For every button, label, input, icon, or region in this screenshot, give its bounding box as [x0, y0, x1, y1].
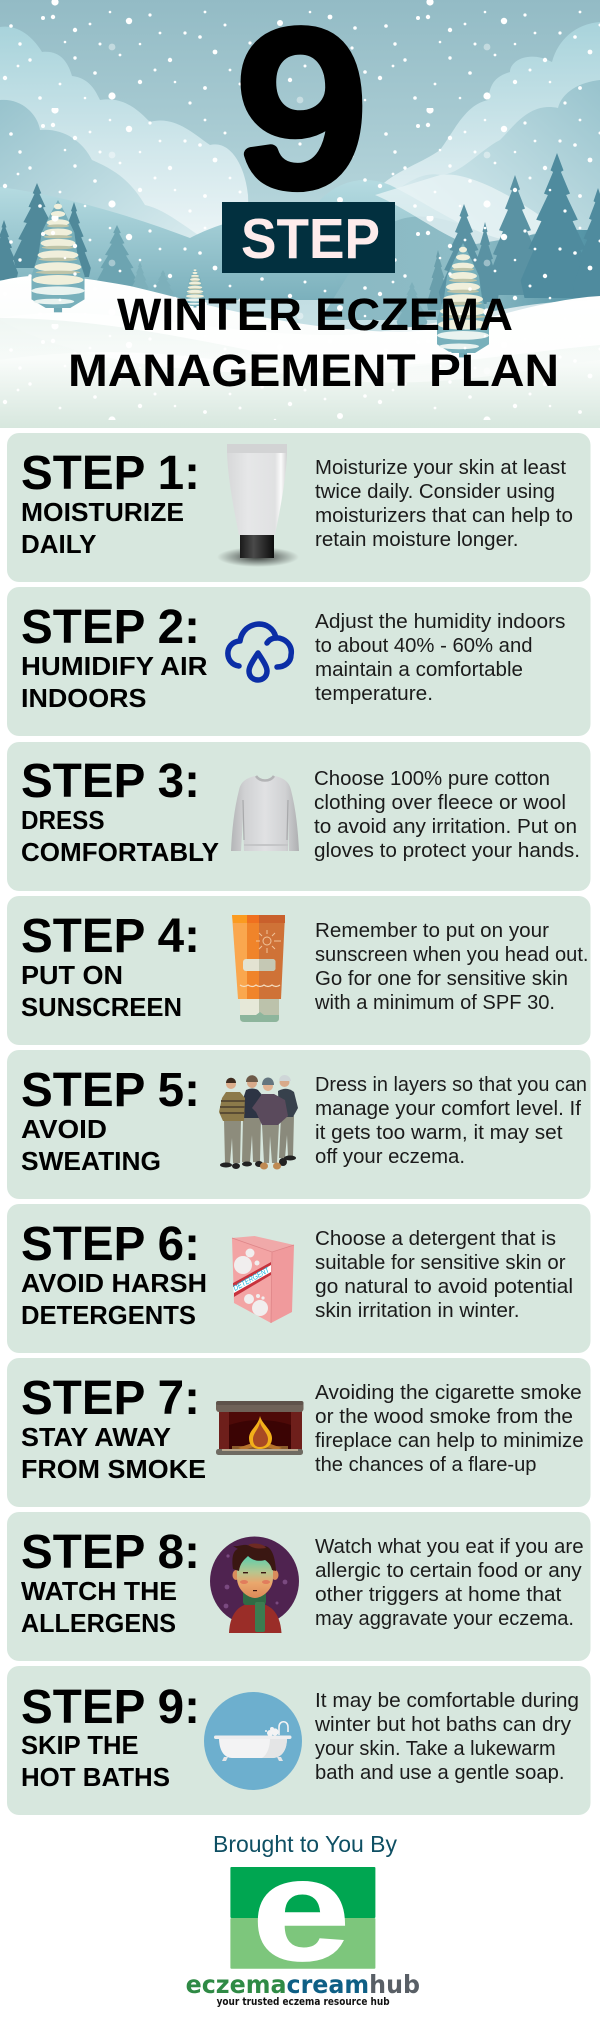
step 6 text: Choose a detergent that is	[315, 1228, 556, 1250]
step 1 subtitle: MOISTURIZE	[21, 497, 184, 527]
title: winter eczema management plan: MANAGEMENT PLAN	[68, 345, 559, 396]
title: winter eczema management plan: WINTER ECZEMA	[117, 289, 513, 340]
icon: fireplace	[216, 1401, 304, 1455]
step 7 subtitle	[21, 1422, 206, 1484]
step 5 text: Dress in layers so that you can	[315, 1074, 587, 1096]
title badge: STEP: STEP	[241, 207, 380, 271]
icon: sunscreen tube	[232, 915, 285, 1022]
step 2 text	[315, 611, 566, 705]
step 3 subtitle: COMFORTABLY	[21, 837, 219, 867]
step 8 text	[315, 1536, 584, 1630]
footer: brought to you by: Brought to You By	[213, 1831, 397, 1857]
step 6 subtitle: DETERGENTS	[21, 1300, 196, 1330]
step 5 text: it gets too warm, it may set	[315, 1122, 563, 1144]
step 2 heading: STEP 2:	[21, 601, 200, 654]
step 7 subtitle: STAY AWAY	[21, 1422, 171, 1452]
step 4 text: Remember to put on your	[315, 920, 549, 942]
panel: step 9	[7, 1666, 590, 1815]
step 3 text: clothing over fleece or wool	[314, 792, 566, 814]
panel: step 5	[7, 1050, 590, 1199]
step 5 subtitle	[21, 1114, 161, 1176]
icon: moisturizer tube	[217, 444, 299, 567]
step 9 text: winter but hot baths can dry	[314, 1714, 571, 1736]
logo wordmark: eczemacreamhub	[186, 1970, 420, 1999]
step 3 subtitle	[21, 805, 219, 867]
step 4 subtitle: PUT ON	[21, 960, 123, 990]
step 3 text: to avoid any irritation. Put on	[314, 816, 577, 838]
step 8 heading: STEP 8:	[21, 1526, 200, 1579]
icon: person with rash	[210, 1536, 299, 1633]
step 5 subtitle: AVOID	[21, 1114, 107, 1144]
step 9 text	[314, 1690, 579, 1784]
step 7 text: Avoiding the cigarette smoke	[315, 1382, 582, 1404]
logo: eczema cream hub	[186, 1828, 420, 2008]
step 6 subtitle: AVOID HARSH	[21, 1268, 207, 1298]
step 9 subtitle	[21, 1730, 170, 1792]
step 2 text: maintain a comfortable	[315, 659, 523, 681]
step 4 text: with a minimum of SPF 30.	[314, 992, 555, 1014]
background pine trees	[0, 153, 600, 327]
step 2 subtitle: HUMIDIFY AIR	[21, 651, 208, 681]
step 4 text: Go for one for sensitive skin	[315, 968, 568, 990]
step 3 text	[314, 768, 580, 862]
step 7 text: the chances of a flare-up	[315, 1454, 536, 1476]
step 8 subtitle: WATCH THE	[21, 1576, 177, 1606]
step 8 subtitle	[21, 1576, 177, 1638]
step 2 subtitle: INDOORS	[21, 683, 146, 713]
title: winter eczema management plan	[68, 289, 559, 396]
step 1 text: retain moisture longer.	[315, 529, 518, 551]
step 7 text: fireplace can help to minimize	[315, 1430, 584, 1452]
step 9 subtitle: HOT BATHS	[21, 1762, 170, 1792]
panel: step 7	[7, 1358, 590, 1507]
step 4 text	[314, 920, 588, 1014]
step 9 text: your skin. Take a lukewarm	[315, 1738, 556, 1760]
panel: step 3	[7, 742, 590, 891]
step 7 text	[315, 1382, 584, 1476]
step 4 heading: STEP 4:	[21, 910, 200, 963]
step 4 subtitle: SUNSCREEN	[21, 992, 182, 1022]
step 6 subtitle	[21, 1268, 207, 1330]
step 6 text: skin irritation in winter.	[315, 1300, 520, 1322]
icon: bath tub	[204, 1692, 302, 1790]
step 7 subtitle: FROM SMOKE	[21, 1454, 206, 1484]
step 6 text: go natural to avoid potential	[315, 1276, 573, 1298]
step 5 text	[315, 1074, 587, 1168]
step 6 text	[315, 1228, 573, 1322]
step 3 subtitle: DRESS	[21, 805, 104, 835]
step 9 subtitle: SKIP THE	[21, 1730, 138, 1760]
step 4 text: sunscreen when you head out.	[315, 944, 588, 966]
step 9 text: It may be comfortable during	[315, 1690, 579, 1712]
step 9 heading: STEP 9:	[21, 1681, 200, 1734]
header: snowy winter scene	[0, 0, 600, 428]
snow-covered trees	[31, 200, 489, 357]
step 1 text: Moisturize your skin at least	[315, 457, 566, 479]
panel: step 1	[7, 433, 590, 582]
icon: group of people in layers	[219, 1075, 298, 1170]
icon: sweater	[231, 776, 299, 851]
panel: step 4	[7, 896, 590, 1045]
step 1 heading: STEP 1:	[21, 447, 200, 500]
step 1 text: twice daily. Consider using	[315, 481, 555, 503]
step 2 text: to about 40% - 60% and	[315, 635, 532, 657]
step 5 heading: STEP 5:	[21, 1064, 200, 1117]
step 1 subtitle: DAILY	[21, 529, 96, 559]
step 8 text: other triggers at home that	[315, 1584, 562, 1606]
step 9 text: bath and use a gentle soap.	[315, 1762, 564, 1784]
icon: humidity cloud	[228, 624, 291, 680]
step 4 subtitle	[21, 960, 182, 1022]
step 5 subtitle: SWEATING	[21, 1146, 161, 1176]
step 5 text: manage your comfort level. If	[315, 1098, 581, 1120]
step 2 subtitle	[21, 651, 208, 713]
panel: step 2	[7, 587, 590, 736]
step 2 text: temperature.	[315, 683, 433, 705]
logo: eczema cream hub: e	[251, 1828, 351, 1991]
step 1 subtitle	[21, 497, 184, 559]
step 1 text	[315, 457, 573, 551]
falling snow	[0, 0, 600, 420]
step 8 text: Watch what you eat if you are	[315, 1536, 584, 1558]
step 3 text: Choose 100% pure cotton	[314, 768, 550, 790]
icon: detergent box	[232, 1236, 294, 1323]
panel: step 8	[7, 1512, 590, 1661]
logo tagline: your trusted eczema resource hub	[217, 1996, 390, 2008]
step 2 text: Adjust the humidity indoors	[315, 611, 566, 633]
step 6 heading: STEP 6:	[21, 1218, 200, 1271]
step 8 text: allergic to certain food or any	[315, 1560, 582, 1582]
step 5 text: off your eczema.	[315, 1146, 465, 1168]
panel: step 6	[7, 1204, 590, 1353]
icon: detergent box: DETERGENT	[232, 1265, 272, 1293]
step 7 text: or the wood smoke from the	[315, 1406, 573, 1428]
step 3 heading: STEP 3:	[21, 755, 200, 808]
step 3 text: gloves to protect your hands.	[314, 840, 580, 862]
step 1 text: moisturizers that can help to	[315, 505, 573, 527]
snow ground	[0, 276, 600, 428]
step 8 text: may aggravate your eczema.	[315, 1608, 574, 1630]
step 8 subtitle: ALLERGENS	[21, 1608, 176, 1638]
step 6 text: suitable for sensitive skin or	[315, 1252, 566, 1274]
step 7 heading: STEP 7:	[21, 1372, 200, 1425]
